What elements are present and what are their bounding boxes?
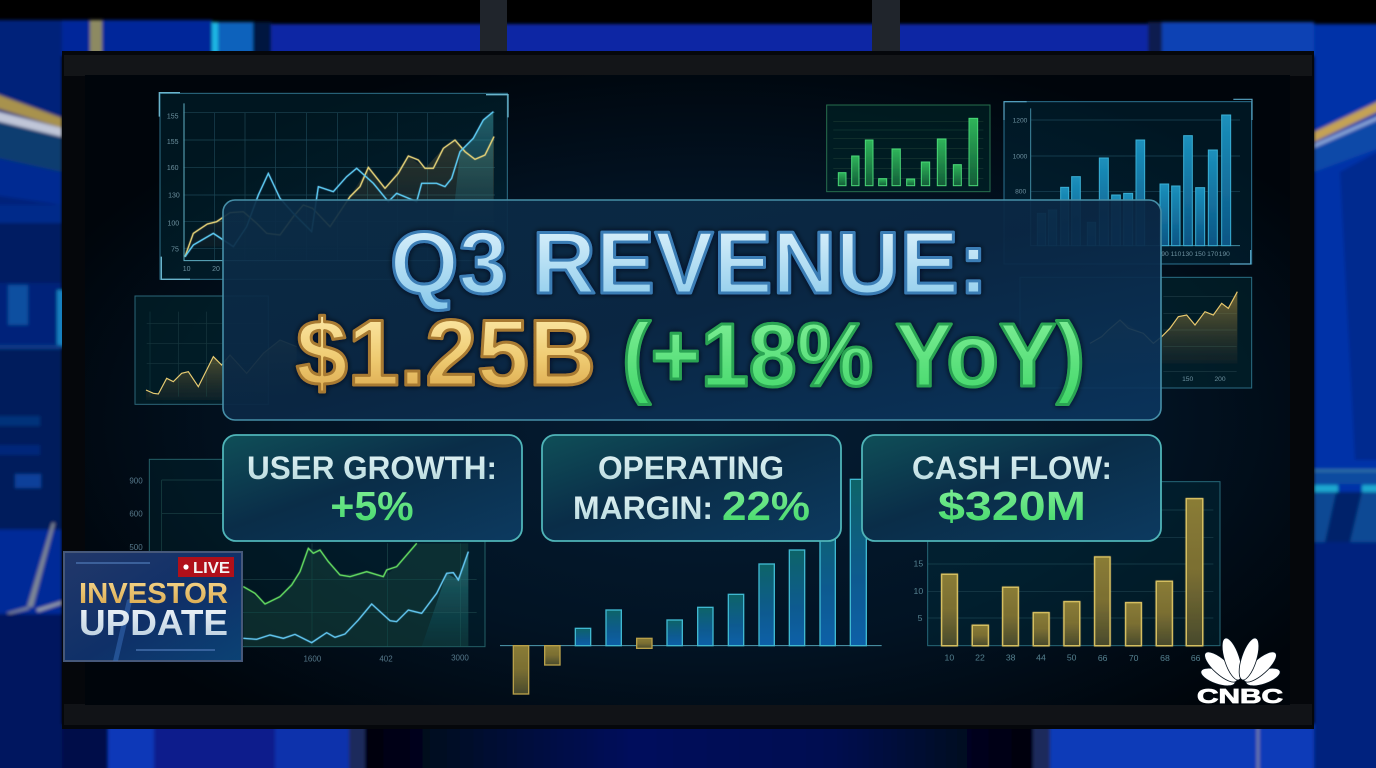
bar chart: blue top right: 170 (1207, 251, 1219, 258)
card: user growth: USER GROWTH: (247, 450, 497, 486)
bar chart: blue top right (1004, 99, 1252, 264)
bar chart: gold bottom right: 38 (1006, 652, 1016, 662)
bar chart: gold bottom right: 50 (1067, 652, 1077, 662)
line chart: top left: 100 (168, 220, 179, 227)
bar chart: centre bottom (500, 479, 882, 694)
card: user growth (223, 435, 522, 541)
line chart: gold right (1020, 277, 1252, 388)
bar chart: blue top right: 110 (1171, 251, 1182, 258)
bar chart: blue top right: 90 (1161, 251, 1169, 258)
line chart: gold right: 150 (1182, 376, 1194, 383)
line chart: small gold left (135, 296, 297, 404)
card: user growth: +5% (330, 483, 414, 529)
card: operating margin (542, 435, 841, 541)
line chart: green and blue bottom left: 402 (379, 654, 393, 663)
bar chart: green top (827, 105, 990, 192)
bar chart: gold bottom right: 70 (1129, 653, 1139, 663)
line chart: top left (159, 93, 508, 279)
line chart: top left: 155 (167, 113, 179, 120)
line chart: green and blue bottom left: 1600 (303, 654, 322, 663)
line chart: top left: 20 (212, 266, 220, 273)
bar chart: gold bottom right: 5 (918, 613, 923, 623)
figure: revenue amount: $1.25B (296, 300, 596, 405)
bar chart: blue top right: 800 (1015, 188, 1027, 195)
bar chart: gold bottom right: 68 (1160, 653, 1170, 663)
line chart: green and blue bottom left: 900 (129, 476, 143, 485)
panel: headline revenue (223, 200, 1161, 420)
card: operating margin: OPERATING (598, 450, 784, 486)
bar chart: gold bottom right (914, 482, 1220, 663)
line chart: green and blue bottom left: 3000 (451, 654, 469, 663)
card: cash flow: $320M (938, 483, 1086, 529)
bar chart: gold bottom right: 66 (1191, 653, 1201, 663)
bar chart: blue top right: 1200 (1013, 118, 1028, 125)
heading: Q3 revenue: Q3 REVENUE: (390, 213, 988, 312)
bar chart: gold bottom right: 22 (975, 652, 985, 662)
lower third: investor update: INVESTOR (79, 578, 228, 610)
line chart: gold right: 200 (1214, 376, 1226, 383)
bar chart: gold bottom right: 66 (1098, 653, 1108, 663)
line chart: top left: 160 (167, 165, 179, 172)
card: operating margin: MARGIN: (573, 490, 713, 526)
card: operating margin: 22% (722, 483, 810, 529)
lower third: investor update: UPDATE (79, 602, 228, 643)
bar chart: gold bottom right: 15 (914, 559, 923, 569)
badge: live: LIVE (193, 560, 230, 577)
bar chart: blue top right: 130 (1182, 251, 1193, 258)
card: cash flow (862, 435, 1161, 541)
line chart: top left: 75 (171, 246, 179, 253)
line chart: green and blue bottom left (129, 459, 485, 663)
bar chart: blue top right: 150 (1194, 251, 1206, 258)
line chart: green and blue bottom left: 500 (129, 543, 143, 552)
lower third: investor update (64, 552, 242, 661)
bar chart: gold bottom right: 10 (914, 586, 923, 596)
bar chart: gold bottom right: 10 (945, 652, 954, 662)
line chart: top left: 155 (167, 139, 179, 146)
badge: live (178, 557, 234, 577)
line chart: top left: 130 (168, 193, 180, 200)
bar chart: blue top right: 1000 (1013, 153, 1028, 160)
line chart: top left: 10 (183, 266, 191, 273)
logo: CNBC peacock (1197, 636, 1283, 708)
card: cash flow: CASH FLOW: (912, 450, 1112, 486)
bar chart: gold bottom right: 44 (1036, 652, 1046, 662)
line chart: green and blue bottom left: 600 (129, 510, 143, 519)
logo: CNBC peacock: CNBC (1197, 686, 1283, 708)
figure: year over year growth: (+18% YoY) (622, 306, 1085, 406)
bar chart: blue top right: 190 (1219, 251, 1230, 258)
